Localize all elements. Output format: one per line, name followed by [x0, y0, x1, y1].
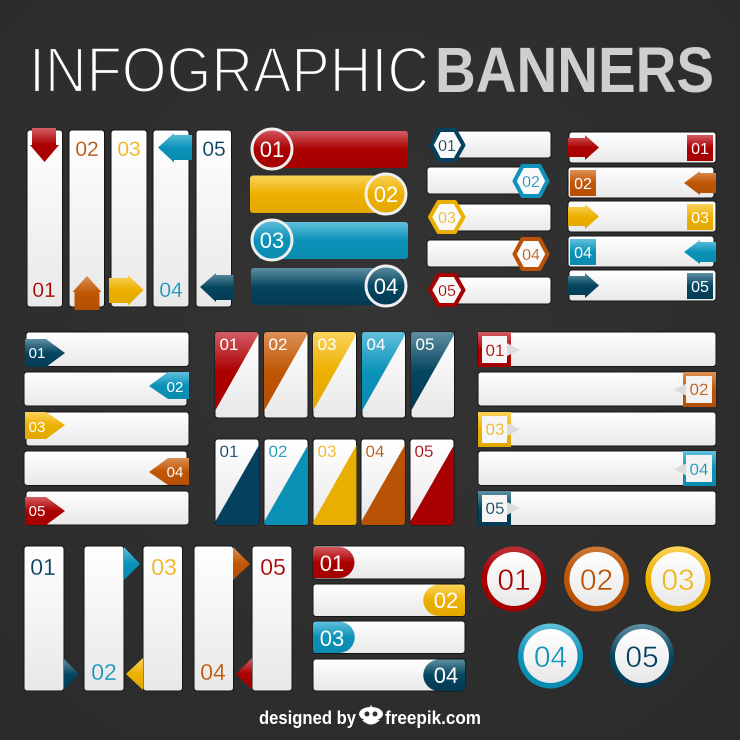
panel: glossy bars with circles: 04 [374, 274, 398, 299]
panel: pill tab banners: 01 [320, 551, 344, 576]
panel: glossy bars with circles: 01 [260, 137, 284, 162]
panel: diagonal cards bottom row: 04 [366, 442, 384, 461]
panel: number circles: 02 [580, 564, 613, 597]
panel: diagonal cards top row [215, 332, 454, 418]
panel: vertical arrow cards: 02 [75, 138, 99, 161]
panel: vertical cards with triangles: 05 [260, 554, 286, 580]
panel: diagonal cards top row: 04 [367, 335, 385, 354]
panel: tag banners: 01 [29, 345, 45, 362]
panel: glossy bars with circles: 02 [374, 182, 398, 207]
panel: pill tab banners: 03 [320, 626, 344, 651]
icon: freepik mascot [359, 705, 383, 724]
panel: tag banners: 03 [29, 419, 45, 436]
panel: vertical cards with triangles: 03 [151, 554, 177, 580]
panel: arrow and square banners: 04 [574, 245, 592, 262]
panel: square outline banners: 02 [690, 380, 708, 399]
panel: vertical cards with triangles: 04 [200, 659, 226, 685]
panel: vertical arrow cards: 03 [117, 138, 141, 161]
panel: diagonal cards bottom row: 03 [318, 442, 336, 461]
icon: blue left arrow [158, 133, 192, 162]
title [29, 34, 714, 106]
panel: tag banners: 04 [167, 464, 183, 481]
panel: diagonal cards top row: 02 [269, 335, 287, 354]
panel: square outline banners [478, 332, 716, 526]
panel: diagonal cards bottom row: 01 [220, 442, 238, 461]
footer credit: freepik.com [385, 708, 481, 728]
title: INFOGRAPHIC [29, 34, 429, 106]
panel: pill tab banners: 02 [434, 588, 458, 613]
panel: pill tab banners: 04 [434, 663, 458, 688]
panel: diagonal cards top row: 03 [318, 335, 336, 354]
panel: diagonal cards top row: 01 [220, 335, 238, 354]
panel: square outline banners: 05 [486, 499, 504, 518]
panel: square outline banners: 01 [486, 341, 504, 360]
panel: hexagon banners [427, 130, 551, 305]
panel: number circles: 01 [497, 564, 531, 597]
panel: vertical cards with triangles: 01 [30, 554, 56, 580]
panel: tag banners: 02 [167, 379, 183, 396]
panel: vertical arrow cards [27, 128, 234, 310]
panel: hexagon banners: 04 [522, 247, 540, 264]
panel: vertical cards with triangles [24, 546, 292, 691]
panel: diagonal cards bottom row: 02 [269, 442, 287, 461]
panel: vertical arrow cards: 05 [202, 138, 226, 161]
panel: hexagon banners: 02 [522, 174, 540, 191]
panel: hexagon banners: 01 [438, 138, 456, 155]
panel: tag banners [24, 332, 189, 525]
panel: hexagon banners: 05 [438, 283, 456, 300]
panel: arrow and square banners: 03 [691, 210, 709, 227]
panel: pill tab banners [313, 546, 465, 691]
icon: navy left arrow [200, 273, 234, 302]
icon: red down arrow [30, 128, 59, 162]
panel: number circles [482, 546, 711, 688]
footer credit: designed by [259, 708, 356, 728]
panel: glossy bars with circles: 03 [260, 228, 284, 253]
panel: number circles: 03 [661, 564, 695, 597]
panel: diagonal cards top row: 05 [416, 335, 434, 354]
panel: vertical arrow cards: 04 [159, 279, 183, 302]
footer credit [259, 705, 481, 728]
icon: yellow right arrow [109, 275, 144, 306]
panel: number circles: 05 [625, 641, 659, 674]
panel: vertical cards with triangles: 02 [91, 659, 117, 685]
icon: orange up arrow [72, 276, 102, 310]
panel: hexagon banners: 03 [438, 210, 456, 227]
panel: tag banners: 05 [29, 503, 45, 520]
panel: square outline banners: 04 [690, 460, 708, 479]
panel: arrow and square banners: 01 [691, 141, 709, 158]
panel: vertical arrow cards: 01 [32, 279, 56, 302]
panel: square outline banners: 03 [486, 420, 504, 439]
panel: arrow and square banners [568, 132, 716, 301]
panel: arrow and square banners: 02 [574, 176, 592, 193]
panel: glossy bars with circles [250, 129, 408, 306]
panel: diagonal cards bottom row: 05 [415, 442, 433, 461]
panel: diagonal cards bottom row [215, 439, 454, 525]
panel: number circles: 04 [534, 641, 567, 674]
panel: arrow and square banners: 05 [691, 279, 709, 296]
